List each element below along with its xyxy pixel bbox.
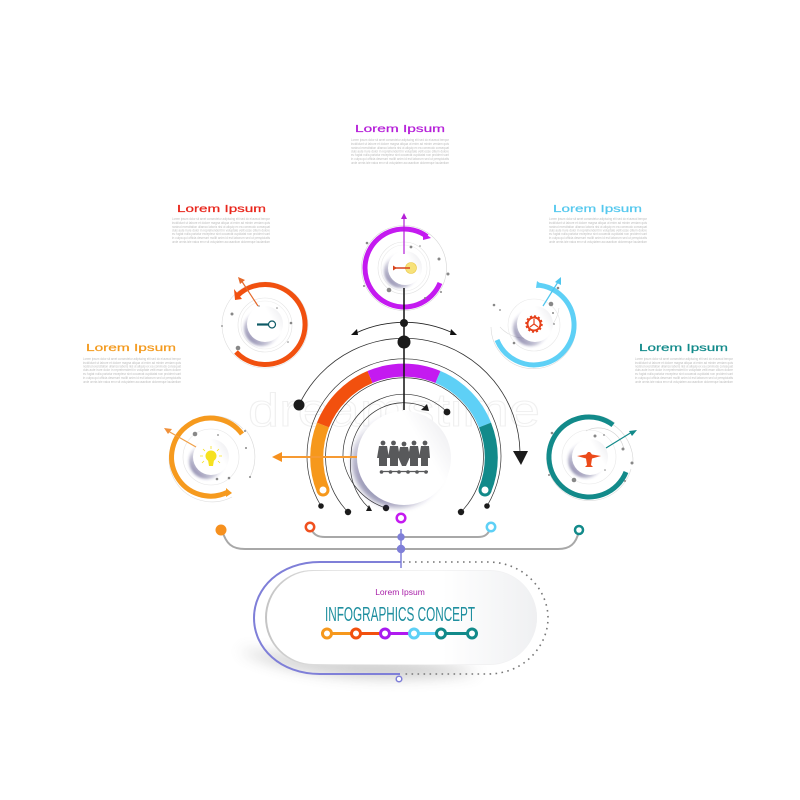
thin outer arc with arrow — [294, 338, 528, 465]
text block: red — [172, 203, 271, 244]
text block: red: eu fugiat nulla pariatur excepteur sint occaecat cupidatat non proident sunt — [172, 232, 270, 236]
text block: red: duis aute irure dolor in reprehenderit in voluptate velit esse cillum dolore — [172, 228, 270, 232]
pill panel: infographics concept — [238, 562, 548, 682]
central disc shadow — [352, 414, 446, 508]
node: red circle with key — [221, 277, 308, 368]
pill outlines — [254, 562, 548, 682]
text block: teal: duis aute irure dolor in reprehenderit in voluptate velit esse cillum dolore — [635, 368, 733, 372]
icon: chain of dots — [380, 470, 428, 474]
guide arc end dots — [318, 404, 490, 515]
icon: people — [377, 441, 430, 466]
text block: red: Lorem ipsum dolor sit amet consectetur adipiscing elit sed do eiusmod tempor — [172, 217, 271, 221]
text block: purple: eu fugiat nulla pariatur excepteur sint occaecat cupidatat non proident sunt — [351, 153, 449, 157]
text block: orange: nostrud exercitation ullamco laboris nisi ut aliquip ex ea commodo consequat — [83, 364, 181, 368]
text block: purple: Lorem Ipsum — [355, 123, 445, 135]
text block: teal — [635, 342, 734, 384]
pill body — [265, 570, 537, 665]
text block: cyan — [549, 203, 648, 244]
node: teal circle with plane — [547, 415, 637, 501]
top fan arc with arrows — [351, 322, 457, 335]
pill title: INFOGRAPHICS CONCEPT — [325, 604, 475, 626]
bottom connectors — [216, 514, 583, 568]
watermark: dreamstime — [248, 384, 540, 436]
text block: red: unde omnis iste natus error sit voluptatem accusantium doloremque laudantium — [172, 240, 270, 244]
text block: purple: incididunt ut labore et dolore magna aliqua ut enim ad minim veniam quis — [351, 142, 449, 146]
text block: purple: duis aute irure dolor in reprehenderit in voluptate velit esse cillum dolore — [351, 150, 449, 154]
text block: teal: incididunt ut labore et dolore magna aliqua ut enim ad minim veniam quis — [635, 361, 733, 365]
text block: cyan: Lorem Ipsum — [553, 203, 642, 215]
text block: purple: Lorem ipsum dolor sit amet consectetur adipiscing elit sed do eiusmod tempor — [351, 138, 450, 142]
text block: orange: unde omnis iste natus error sit voluptatem accusantium doloremque laudantium — [83, 380, 181, 384]
text block: teal: in culpa qui officia deserunt mollit anim id est laborum sed ut perspiciatis — [635, 376, 733, 380]
central dial — [272, 288, 528, 515]
pill shadow — [238, 650, 480, 678]
text block: purple: nostrud exercitation ullamco laboris nisi ut aliquip ex ea commodo consequat — [351, 146, 449, 150]
text block: teal: Lorem ipsum dolor sit amet consectetur adipiscing elit sed do eiusmod tempor — [635, 357, 734, 361]
node: orange circle with light bulb — [164, 416, 255, 502]
arc end rings — [318, 485, 490, 495]
text block: orange: incididunt ut labore et dolore magna aliqua ut enim ad minim veniam quis — [83, 361, 181, 365]
text block: orange: in culpa qui officia deserunt mollit anim id est laborum sed ut perspiciatis — [83, 376, 181, 380]
text block: orange: Lorem ipsum dolor sit amet consectetur adipiscing elit sed do eiusmod tempor — [83, 357, 182, 361]
text block: teal: eu fugiat nulla pariatur excepteur sint occaecat cupidatat non proident sunt — [635, 372, 733, 376]
text block: cyan: eu fugiat nulla pariatur excepteur sint occaecat cupidatat non proident sunt — [549, 232, 647, 236]
central disc — [357, 411, 451, 505]
thin guide arcs — [307, 359, 501, 512]
text block: cyan: Lorem ipsum dolor sit amet consectetur adipiscing elit sed do eiusmod tempor — [549, 217, 648, 221]
text block: cyan: unde omnis iste natus error sit voluptatem accusantium doloremque laudantium — [549, 240, 647, 244]
text block: orange — [83, 342, 182, 384]
vertical stem — [398, 288, 410, 410]
orange arrow — [272, 452, 357, 462]
text block: cyan: nostrud exercitation ullamco laboris nisi ut aliquip ex ea commodo consequat — [549, 225, 647, 229]
node: purple circle with dart — [362, 213, 450, 310]
pill subtitle: Lorem Ipsum — [375, 587, 425, 597]
text block: red: Lorem Ipsum — [177, 203, 266, 215]
colored arc — [317, 370, 491, 490]
text block: cyan: incididunt ut labore et dolore magna aliqua ut enim ad minim veniam quis — [549, 221, 647, 225]
node: cyan circle with gear — [491, 277, 576, 369]
text block: red: incididunt ut labore et dolore magna aliqua ut enim ad minim veniam quis — [172, 221, 270, 225]
text block: red: nostrud exercitation ullamco laboris nisi ut aliquip ex ea commodo consequat — [172, 225, 270, 229]
text block: teal: unde omnis iste natus error sit voluptatem accusantium doloremque laudantium — [635, 380, 733, 384]
text block: teal: Lorem Ipsum — [639, 342, 728, 354]
text block: purple — [351, 123, 450, 165]
text block: orange: eu fugiat nulla pariatur excepteur sint occaecat cupidatat non proident sunt — [83, 372, 181, 376]
timeline rings — [322, 629, 476, 638]
text block: orange: duis aute irure dolor in reprehenderit in voluptate velit esse cillum dolore — [83, 368, 181, 372]
text block: cyan: in culpa qui officia deserunt mollit anim id est laborum sed ut perspiciatis — [549, 236, 647, 240]
text block: cyan: duis aute irure dolor in reprehenderit in voluptate velit esse cillum dolore — [549, 228, 647, 232]
text block: purple: unde omnis iste natus error sit voluptatem accusantium doloremque laudantium — [351, 161, 449, 165]
text block: red: in culpa qui officia deserunt mollit anim id est laborum sed ut perspiciatis — [172, 236, 270, 240]
text block: teal: nostrud exercitation ullamco laboris nisi ut aliquip ex ea commodo consequat — [635, 364, 733, 368]
text block: orange: Lorem Ipsum — [86, 342, 176, 354]
text block: purple: in culpa qui officia deserunt mollit anim id est laborum sed ut perspiciatis — [351, 157, 449, 161]
